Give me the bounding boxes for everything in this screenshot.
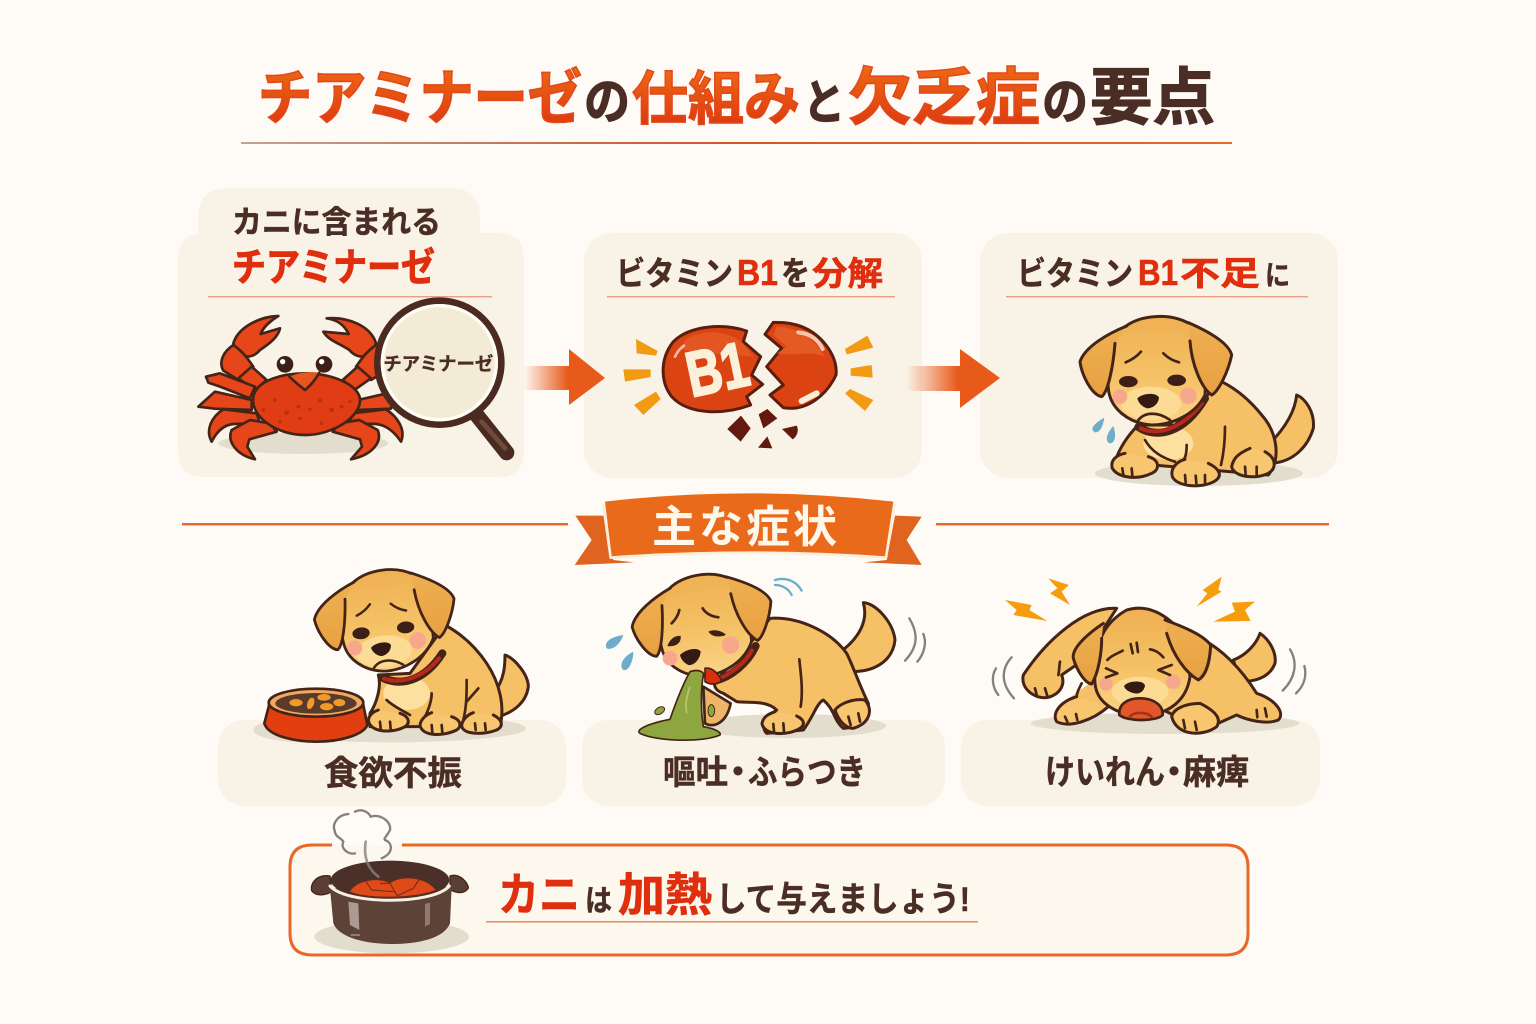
symptom label: loss of appetite: 食欲不振 <box>324 755 462 793</box>
symptom label: seizures and paralysis <box>1045 754 1249 792</box>
title: チアミナーゼ <box>258 65 582 132</box>
title: 要点 <box>1090 64 1215 133</box>
banner: main symptoms <box>575 493 922 565</box>
panel heading: B1 deficiency <box>1017 252 1290 293</box>
icon: broken B1 capsule <box>623 322 873 448</box>
symptom label: seizures and paralysis: ・ <box>1157 754 1191 792</box>
symptom label: vomiting and wobbling: ふらつき <box>748 754 866 792</box>
section rule: left <box>182 523 568 525</box>
icon: broken B1 capsule: B1 <box>680 329 755 411</box>
callout text <box>498 869 970 921</box>
panel heading: B1 breakdown: 分解 <box>812 255 883 292</box>
callout text: カニ <box>498 869 580 921</box>
title underline <box>241 142 1232 144</box>
panel heading: B1 deficiency: に <box>1265 260 1290 291</box>
illustration: vomiting puppy <box>606 566 925 740</box>
panel: B1 breakdown <box>584 233 922 478</box>
panel heading: B1 deficiency: B1 <box>1138 252 1178 293</box>
symptom label: seizures and paralysis: 麻痺 <box>1183 754 1249 792</box>
arrow: B1 to deficiency <box>906 349 1000 408</box>
panel heading: B1 deficiency: ビタミン <box>1017 255 1133 292</box>
arrow: crab to B1 <box>523 349 605 405</box>
title: の <box>1042 74 1088 130</box>
panel heading: B1 breakdown <box>616 252 883 293</box>
panel heading: B1 breakdown: B1 <box>737 252 778 293</box>
symptom panel: vomiting and wobbling <box>582 566 945 806</box>
symptom panel: loss of appetite <box>218 563 566 806</box>
banner: main symptoms: 主な症状 <box>652 503 837 552</box>
title: 仕組み <box>632 67 800 132</box>
panel heading: B1 breakdown: ビタミン <box>616 255 733 292</box>
symptom panel: seizures and paralysis <box>961 577 1320 806</box>
section rule: right <box>936 523 1329 525</box>
panel heading accent: thiaminase: チアミナーゼ <box>232 247 435 290</box>
title <box>258 64 1215 133</box>
panel: crab thiaminase <box>178 188 524 477</box>
icon: magnifier <box>377 301 507 453</box>
callout text: して与えましょう! <box>716 881 970 919</box>
illustration: puppy and food bowl <box>253 563 528 743</box>
symptom label: vomiting and wobbling <box>663 754 866 792</box>
symptom label: vomiting and wobbling: 嘔吐 <box>663 754 728 792</box>
callout text: 加熱 <box>618 869 712 921</box>
title: の <box>584 74 630 130</box>
panel: B1 deficiency <box>980 233 1338 486</box>
panel heading: crab: カニに含まれる <box>232 205 441 240</box>
title: 欠乏症 <box>848 64 1040 133</box>
illustration: sad puppy <box>1080 316 1314 486</box>
title: と <box>803 77 845 130</box>
callout: cook crab before feeding <box>290 810 1248 955</box>
panel heading: B1 deficiency: 不足 <box>1180 255 1260 292</box>
illustration: convulsing puppy <box>993 577 1305 734</box>
symptom label: seizures and paralysis: けいれん <box>1045 754 1165 792</box>
symptom label: vomiting and wobbling: ・ <box>721 754 755 792</box>
icon: crab <box>198 316 402 459</box>
callout text: は <box>585 885 612 918</box>
icon: steaming pot <box>311 810 469 953</box>
icon: magnifier: チアミナーゼ <box>383 354 494 375</box>
panel heading: B1 breakdown: を <box>781 255 810 292</box>
